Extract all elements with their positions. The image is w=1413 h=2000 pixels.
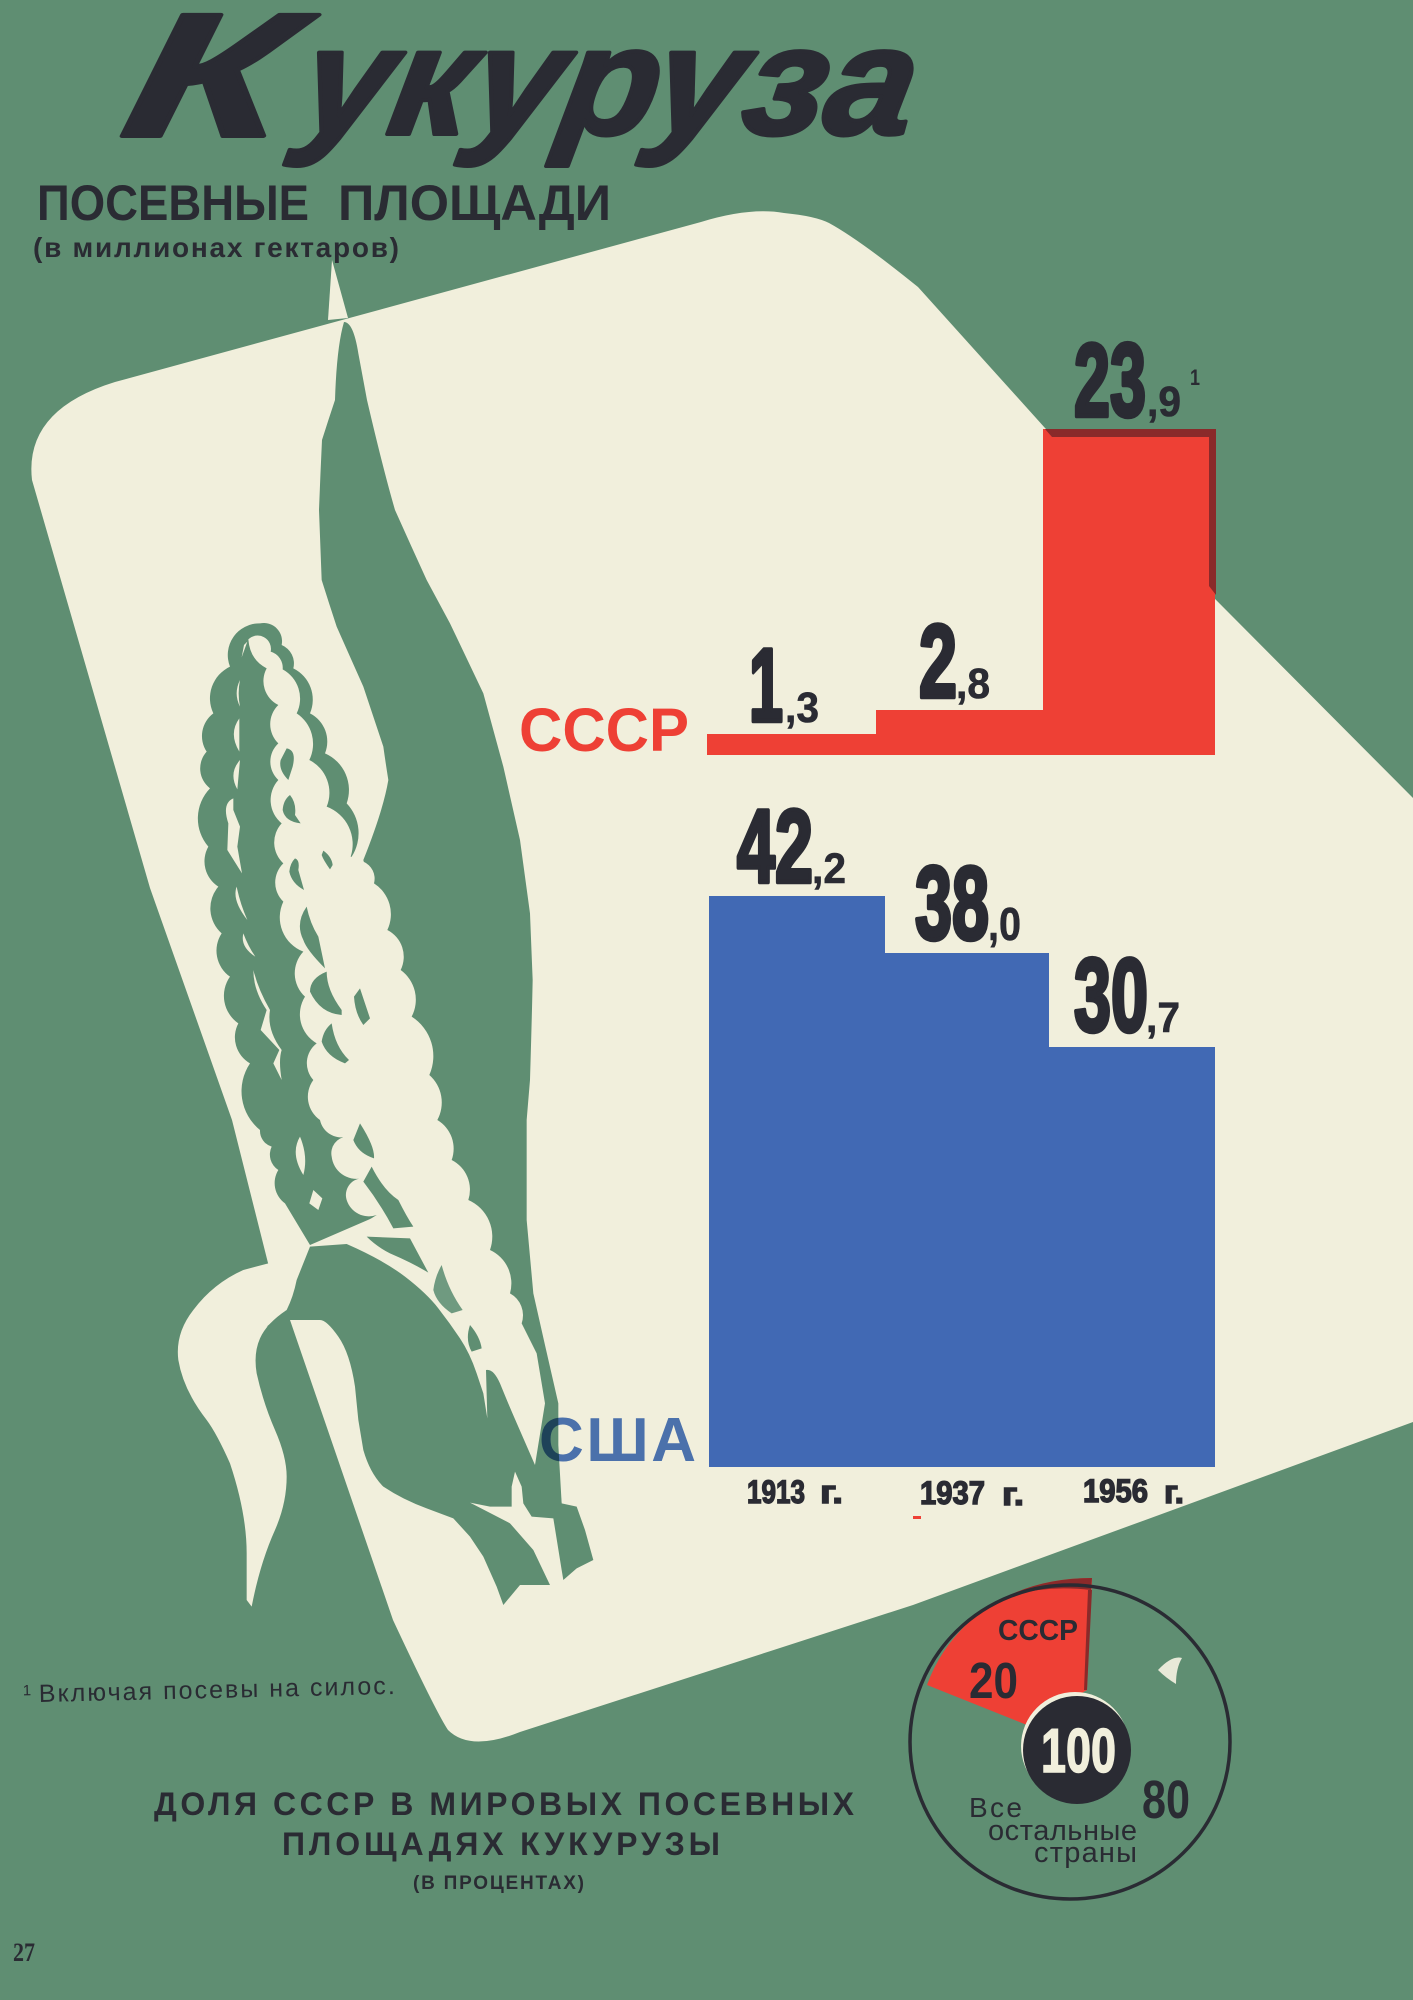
axis labels: years: г. xyxy=(1164,1474,1184,1510)
leaf tip white spike xyxy=(328,260,348,320)
panel: cream tilted background shape xyxy=(31,211,1413,1742)
value 1937: 38,0: ,0 xyxy=(988,898,1021,950)
value 1913: 42,2: ,2 xyxy=(812,845,846,893)
heading: sown areas: ПОСЕВНЫЕ xyxy=(37,175,309,231)
heading: USSR share of world sown area xyxy=(154,1786,855,1894)
value 20: 20 xyxy=(969,1652,1018,1709)
icon: corn cob illustration xyxy=(178,260,593,1607)
lower husk and stem xyxy=(267,1244,593,1605)
value 1956: 30,7: ,7 xyxy=(1146,994,1180,1042)
sector label: СССР xyxy=(998,1615,1078,1647)
series label: USSR: СССР xyxy=(519,696,689,764)
cream kernels of the cob xyxy=(248,636,545,1465)
value 1956: 23,9 with footnote mark: 1 xyxy=(1190,365,1200,390)
label: other countries: остальные xyxy=(988,1815,1137,1847)
chart: USSR sown area bars xyxy=(519,323,1216,764)
value 1956: 23,9 with footnote mark: 23 xyxy=(1074,323,1146,439)
chart: USA sown area bars xyxy=(539,789,1215,1475)
footnote: 1 xyxy=(23,1682,31,1699)
heading: sown areas: ПЛОЩАДИ xyxy=(338,175,611,231)
value 1913: 1,3: ,3 xyxy=(785,684,819,732)
heading: sown areas xyxy=(37,175,611,231)
axis labels: years: 1956 xyxy=(1083,1473,1148,1509)
footnote: Включая посевы на силос. xyxy=(39,1672,395,1708)
heading: USSR share of world sown area: ПЛОЩАДЯХ КУКУРУЗЫ xyxy=(282,1826,720,1862)
long green leaf xyxy=(319,322,562,1503)
axis labels: years: 1913 xyxy=(747,1474,805,1510)
dark overprint on sector xyxy=(1000,1578,1092,1690)
value 1913: 42,2: 42 xyxy=(737,789,813,905)
label: other countries xyxy=(969,1792,1137,1869)
label: other countries: Все xyxy=(969,1792,1022,1823)
axis labels: years xyxy=(747,1473,1184,1512)
page number: 27 xyxy=(13,1938,35,1967)
title: укуруза xyxy=(283,0,932,167)
total 100: 100 xyxy=(1041,1717,1116,1786)
series label: USA: США xyxy=(539,1406,696,1475)
dark overprint on bar edge xyxy=(1045,429,1216,595)
value 1956: 23,9 with footnote mark: ,9 xyxy=(1147,378,1181,426)
value 1956: 30,7: 30 xyxy=(1074,938,1148,1054)
cream crescent xyxy=(1021,1692,1129,1800)
centre disc xyxy=(1023,1696,1131,1804)
value 1937: 38,0: 38 xyxy=(915,846,989,962)
heading: USSR share of world sown area: ДОЛЯ СССР В МИРОВЫХ ПОСЕВНЫХ xyxy=(154,1786,855,1822)
value 1937: 2,8: ,8 xyxy=(956,660,990,708)
axis labels: years: 1937 xyxy=(920,1475,985,1511)
subheading: units: (в миллионах гектаров) xyxy=(33,232,399,263)
heading: USSR share of world sown area: (В ПРОЦЕНТАХ) xyxy=(413,1873,584,1894)
label: other countries: страны xyxy=(1034,1837,1137,1869)
USSR red sector xyxy=(927,1578,1092,1725)
axis labels: years: г. xyxy=(1002,1476,1024,1512)
chart: world share pie diagram xyxy=(910,1578,1230,1899)
pale kernel near husk xyxy=(433,1265,463,1313)
green kernel crescents xyxy=(280,748,482,1352)
cream swoosh of the lower leaf xyxy=(178,1247,310,1607)
value 1937: 2,8: 2 xyxy=(919,604,957,720)
value 1913: 1,3: 1 xyxy=(749,628,783,744)
cream slits in the green band xyxy=(226,642,322,1210)
corn husk silhouette with kernels outline xyxy=(198,623,383,1245)
blue step bars xyxy=(709,896,1215,1467)
axis labels: years: г. xyxy=(820,1474,843,1510)
outer ring xyxy=(910,1585,1230,1899)
red step bars xyxy=(707,429,1215,755)
value 80: 80 xyxy=(1142,1770,1190,1830)
